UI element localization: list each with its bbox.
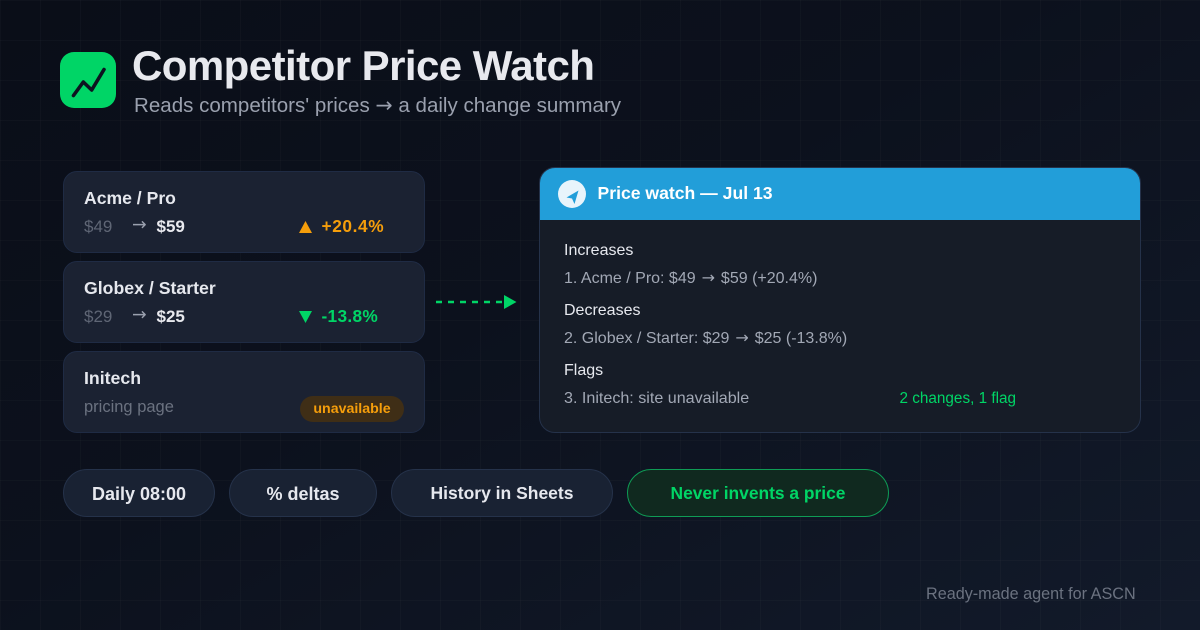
card name: Globex / Starter [84, 278, 216, 298]
delta up: +20.4% [322, 216, 384, 236]
new price: $25 [156, 307, 185, 326]
line 1: 1. Acme / Pro: $49 → $59 (+20.4%) [564, 268, 817, 287]
old price: $29 [84, 307, 112, 326]
status badge: unavailable [313, 400, 391, 416]
icon: telegram [558, 180, 586, 208]
card name: Initech [84, 368, 141, 388]
pricing page label: pricing page [84, 398, 174, 416]
message header [540, 168, 1140, 220]
arrow: → [132, 215, 147, 235]
panel: Telegram message [539, 167, 1141, 433]
panel: Acme card [63, 171, 425, 253]
pill: daily: Daily 08:00 [92, 484, 186, 504]
title: Competitor Price Watch [132, 42, 594, 89]
panel: Initech card [63, 351, 425, 433]
section increases: Increases [564, 242, 633, 259]
pill: deltas: % deltas [266, 484, 340, 504]
arrow: → [132, 305, 147, 325]
new price: $59 [156, 217, 185, 236]
pill: sheets [391, 469, 613, 517]
footer credit: Ready-made agent for ASCN [926, 585, 1136, 603]
status badge [300, 396, 404, 422]
panel: Globex card [63, 261, 425, 343]
section decreases: Decreases [564, 302, 640, 319]
card name: Acme / Pro [84, 188, 176, 208]
subtitle: Reads competitors' prices → a daily change summary [134, 93, 621, 117]
icon: green trend logo [60, 52, 116, 108]
pill: deltas [229, 469, 377, 517]
line 2: 2. Globex / Starter: $29 → $25 (-13.8%) [564, 328, 847, 347]
header title: Price watch — Jul 13 [598, 183, 773, 203]
line 3: 3. Initech: site unavailable [564, 389, 749, 407]
arrow: dashed flow [436, 295, 516, 309]
delta down: -13.8% [322, 306, 378, 326]
summary: 2 changes, 1 flag [900, 390, 1016, 407]
old price: $49 [84, 217, 112, 236]
section flags: Flags [564, 362, 603, 379]
pill: never invents: Never invents a price [671, 483, 845, 503]
pill: daily [63, 469, 215, 517]
pill: sheets: History in Sheets [431, 483, 573, 503]
pill: never invents [627, 469, 889, 517]
